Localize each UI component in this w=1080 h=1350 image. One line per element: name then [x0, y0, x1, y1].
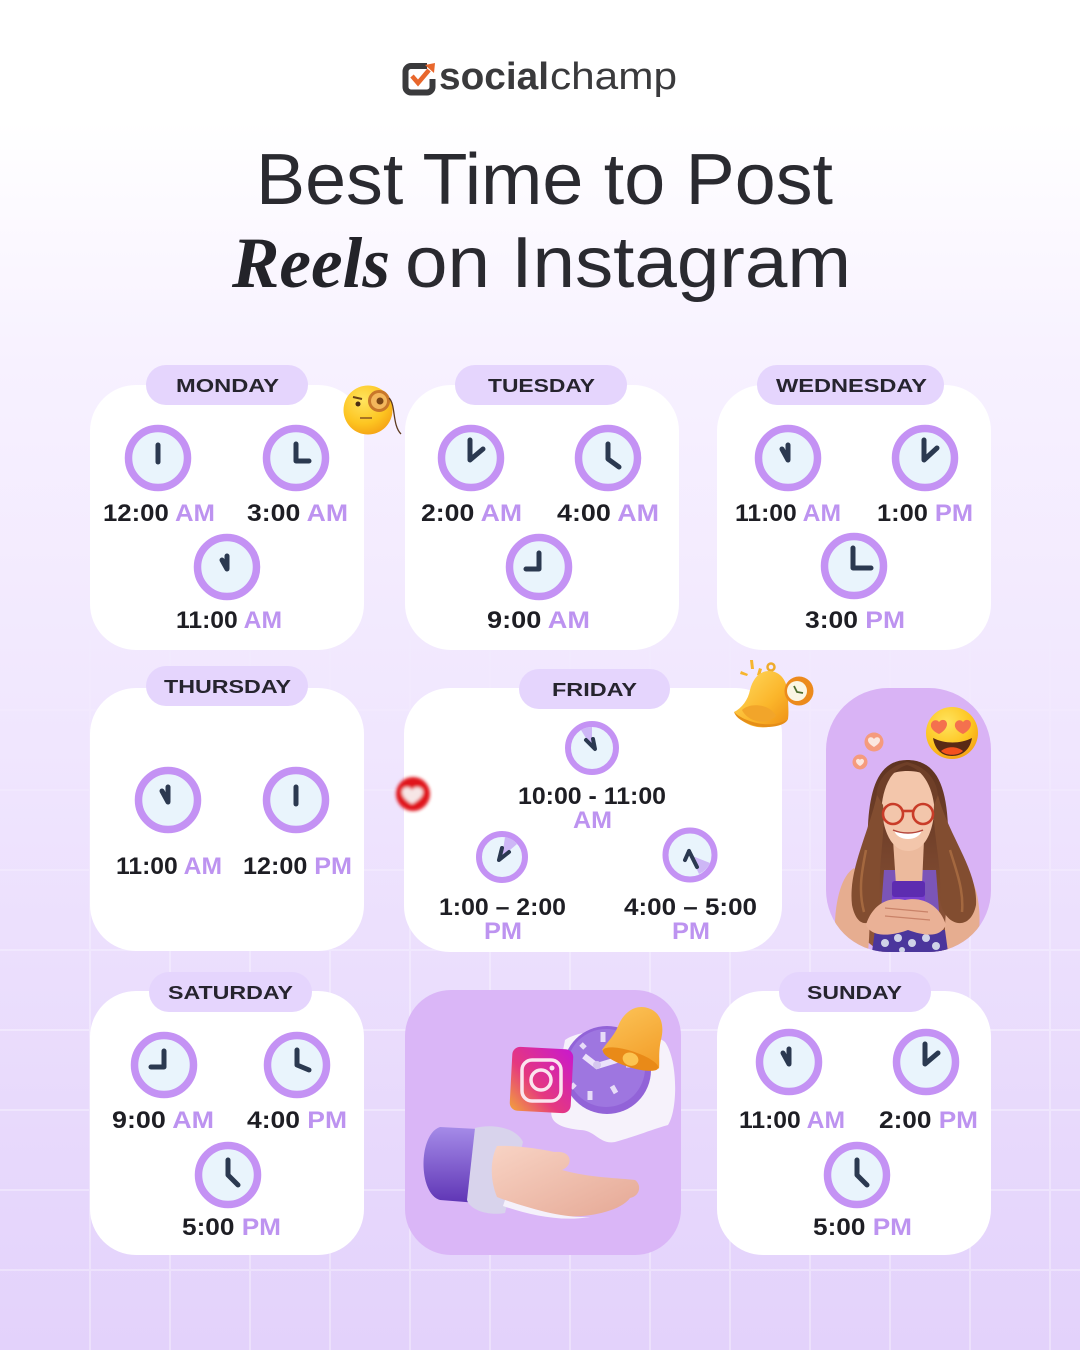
label: 10:00 - 11:00 AM: 10:00 - 11:00 — [518, 783, 666, 810]
icon: blurred red heart — [396, 777, 430, 811]
icon: yellow bell with clock — [734, 660, 814, 727]
label: 9:00 AM: 9:00 AM — [487, 607, 590, 634]
label: 2:00 PM: 2:00 PM — [879, 1107, 978, 1134]
panel: wednesday — [717, 365, 991, 650]
clock: 1:00 - 2:00 PM — [479, 834, 525, 880]
icon: white speech bubble — [551, 1031, 675, 1142]
icon: instagram logo — [509, 1046, 574, 1114]
panel: saturday — [90, 972, 364, 1255]
clock: 10:00 - 11:00 AM — [568, 724, 616, 772]
logo wordmark: champ — [550, 56, 677, 98]
clock: 3:00 AM — [266, 428, 326, 488]
heading: thursday: THURSDAY — [164, 676, 292, 697]
title: Best Time to Post — [256, 140, 833, 220]
heading: wednesday: WEDNESDAY — [776, 375, 928, 396]
label: 1:00 PM: 1:00 PM — [877, 500, 973, 527]
panel: friday — [404, 669, 782, 952]
heading: wednesday — [757, 365, 944, 405]
clock: 9:00 AM — [510, 538, 568, 596]
icon: small hearts — [852, 732, 884, 770]
label: 10:00 - 11:00 AM — [518, 783, 666, 834]
heading: friday — [519, 669, 670, 709]
heading: sunday: SUNDAY — [807, 982, 903, 1003]
label: 12:00 AM: 12:00 AM — [103, 500, 215, 527]
label: 1:00 - 2:00 PM: 1:00 – 2:00 — [439, 894, 566, 921]
panel: tuesday — [405, 365, 679, 650]
clock: 4:00 - 5:00 PM — [666, 830, 714, 880]
icon: monocle emoji — [344, 386, 401, 434]
label: 11:00 AM: 11:00 AM — [176, 607, 282, 634]
label: 2:00 AM: 2:00 AM — [421, 500, 522, 527]
label: 4:00 - 5:00 PM: 4:00 – 5:00 — [624, 894, 757, 921]
label: 1:00 - 2:00 PM: PM — [484, 918, 522, 945]
label: 4:00 AM: 4:00 AM — [557, 500, 659, 527]
label: 11:00 AM: 11:00 AM — [739, 1107, 845, 1134]
logo: socialchamp — [406, 56, 677, 98]
icon: logo checkmark — [406, 63, 435, 92]
title: Reels — [231, 223, 390, 303]
heading: thursday — [146, 666, 308, 706]
heading: sunday — [779, 972, 931, 1012]
clock: 4:00 AM — [578, 428, 638, 488]
heading: saturday — [149, 972, 312, 1012]
label: 12:00 PM: 12:00 PM — [243, 853, 352, 880]
clock: 12:00 AM — [128, 428, 188, 488]
title — [231, 140, 851, 303]
heading: tuesday: TUESDAY — [488, 375, 596, 396]
clock: 11:00 AM — [760, 1032, 818, 1092]
label: 11:00 AM: 11:00 AM — [116, 853, 222, 880]
panel: monday — [90, 365, 364, 650]
label: 3:00 AM: 3:00 AM — [247, 500, 348, 527]
clock: 1:00 PM — [896, 428, 954, 488]
icon: heart-eyes emoji — [926, 707, 978, 759]
title: on Instagram — [405, 223, 851, 303]
panel: sunday — [717, 972, 991, 1255]
label: 4:00 - 5:00 PM: PM — [672, 918, 710, 945]
clock: 3:00 PM — [824, 536, 884, 596]
clock: 2:00 PM — [896, 1032, 956, 1092]
label: 4:00 PM: 4:00 PM — [247, 1107, 347, 1134]
heading: saturday: SATURDAY — [168, 982, 294, 1003]
clock: 12:00 PM — [266, 770, 326, 830]
clock: 11:00 AM — [758, 428, 818, 488]
clock: 2:00 AM — [442, 428, 500, 488]
label: 4:00 - 5:00 PM — [624, 894, 757, 945]
heading: friday: FRIDAY — [552, 679, 638, 700]
label: 1:00 - 2:00 PM — [439, 894, 566, 945]
icon: hand — [424, 1126, 639, 1219]
heading: tuesday — [455, 365, 627, 405]
label: 5:00 PM: 5:00 PM — [813, 1214, 912, 1241]
panel: woman with phone — [826, 688, 991, 953]
icon: orange bell — [600, 999, 676, 1076]
logo wordmark — [439, 56, 677, 98]
clock: 5:00 PM — [828, 1146, 886, 1204]
clock: 11:00 AM — [198, 538, 256, 596]
clock: 9:00 AM — [134, 1036, 194, 1094]
illustration: woman — [835, 760, 980, 953]
clock: 11:00 AM — [138, 770, 198, 830]
panel: thursday — [90, 666, 364, 951]
heading: monday — [146, 365, 308, 405]
label: 5:00 PM: 5:00 PM — [182, 1214, 281, 1241]
label: 9:00 AM: 9:00 AM — [112, 1107, 214, 1134]
clock: 4:00 PM — [268, 1036, 326, 1094]
label: 10:00 - 11:00 AM: AM — [573, 807, 612, 834]
icon: purple clock — [563, 1026, 651, 1114]
heading: monday: MONDAY — [176, 375, 280, 396]
label: 3:00 PM: 3:00 PM — [805, 607, 905, 634]
logo wordmark: social — [439, 56, 549, 98]
clock: 5:00 PM — [198, 1146, 258, 1204]
panel: instagram illustration — [405, 990, 681, 1255]
label: 11:00 AM: 11:00 AM — [735, 500, 841, 527]
